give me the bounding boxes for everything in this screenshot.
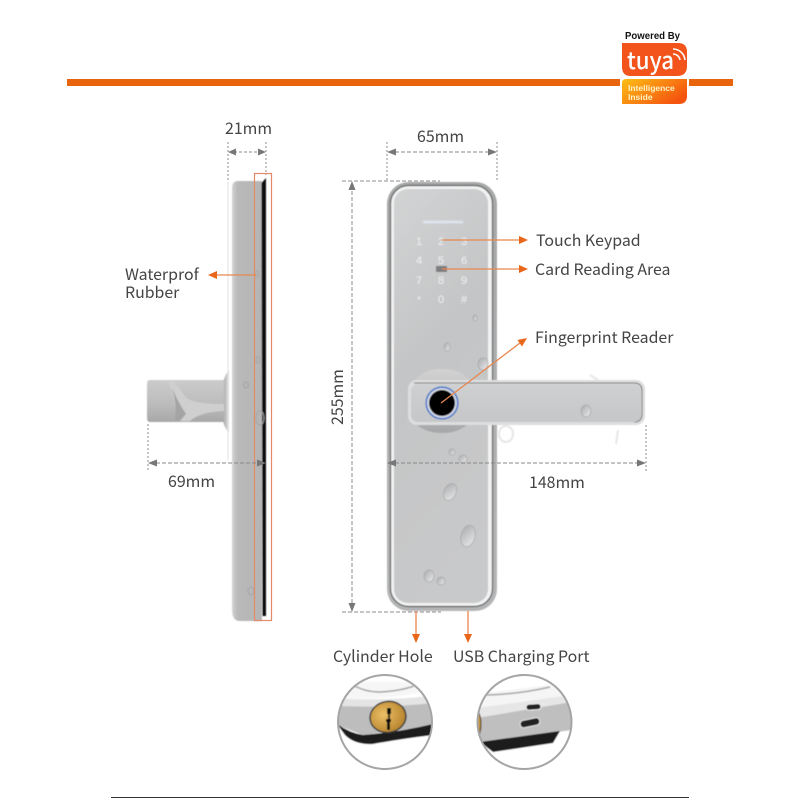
callout: touch keypad: Touch Keypad	[536, 228, 641, 251]
front body	[387, 182, 497, 611]
tuya logo	[620, 31, 689, 107]
droplet below handle	[499, 375, 618, 444]
droplets on panel	[424, 315, 488, 585]
side droplets	[244, 271, 264, 595]
keypad: 4	[416, 255, 422, 267]
keypad: *	[417, 295, 421, 306]
keypad: 6	[461, 255, 467, 267]
side view of lock	[147, 174, 272, 621]
callout: card reading area	[442, 257, 670, 280]
keypad: 2	[438, 236, 444, 248]
label: waterproof rubber: Rubber	[125, 280, 180, 303]
callout: usb charging port: USB Charging Port	[453, 644, 589, 667]
callout: cylinder hole: Cylinder Hole	[333, 644, 433, 667]
21mm dimension	[225, 116, 272, 460]
tuya logo: Intelligence	[628, 83, 675, 93]
keypad	[416, 221, 468, 306]
148mm dimension	[387, 425, 646, 493]
keypad: 1	[416, 236, 422, 248]
detail circle: cylinder hole	[335, 672, 435, 772]
glass panel	[394, 189, 488, 603]
label: waterproof rubber: Waterprof	[125, 262, 200, 285]
bottom divider	[111, 797, 689, 798]
side knob	[147, 370, 229, 432]
lever handle	[408, 380, 645, 425]
label: waterproof rubber	[125, 262, 256, 303]
keypad: 7	[416, 275, 422, 287]
black rubber strip	[262, 178, 266, 616]
detail circle: usb charging port	[473, 672, 574, 772]
front view of lock	[387, 182, 645, 611]
orange header bar	[67, 79, 733, 86]
side body	[232, 181, 262, 621]
card icon	[436, 266, 447, 272]
69mm dimension: 69mm	[168, 469, 215, 492]
keypad: 0	[438, 294, 444, 306]
69mm dimension	[148, 424, 266, 492]
callout: cylinder hole	[333, 611, 433, 667]
keypad: 5	[438, 255, 444, 267]
callout: touch keypad	[442, 228, 641, 251]
65mm dimension: 65mm	[417, 124, 464, 147]
keypad: 3	[461, 236, 467, 248]
handle base	[414, 369, 470, 433]
waterproof rubber outline	[254, 174, 272, 620]
tuya logo: Powered By	[625, 31, 680, 42]
tuya logo: tuya	[627, 41, 674, 76]
21mm dimension: 21mm	[225, 116, 272, 139]
callout: card reading area: Card Reading Area	[535, 257, 670, 280]
255mm dimension: 255mm	[325, 369, 348, 425]
callout: fingerprint reader: Fingerprint Reader	[535, 325, 674, 348]
fingerprint reader	[426, 386, 458, 420]
255mm dimension	[325, 181, 441, 612]
callout: usb charging port	[453, 611, 589, 667]
callout: fingerprint reader	[441, 325, 674, 403]
148mm dimension: 148mm	[529, 470, 585, 493]
tuya logo: Inside	[628, 92, 653, 102]
keypad: #	[461, 294, 468, 306]
65mm dimension	[387, 124, 497, 182]
keypad: 9	[461, 275, 467, 287]
keypad: 8	[438, 275, 444, 287]
